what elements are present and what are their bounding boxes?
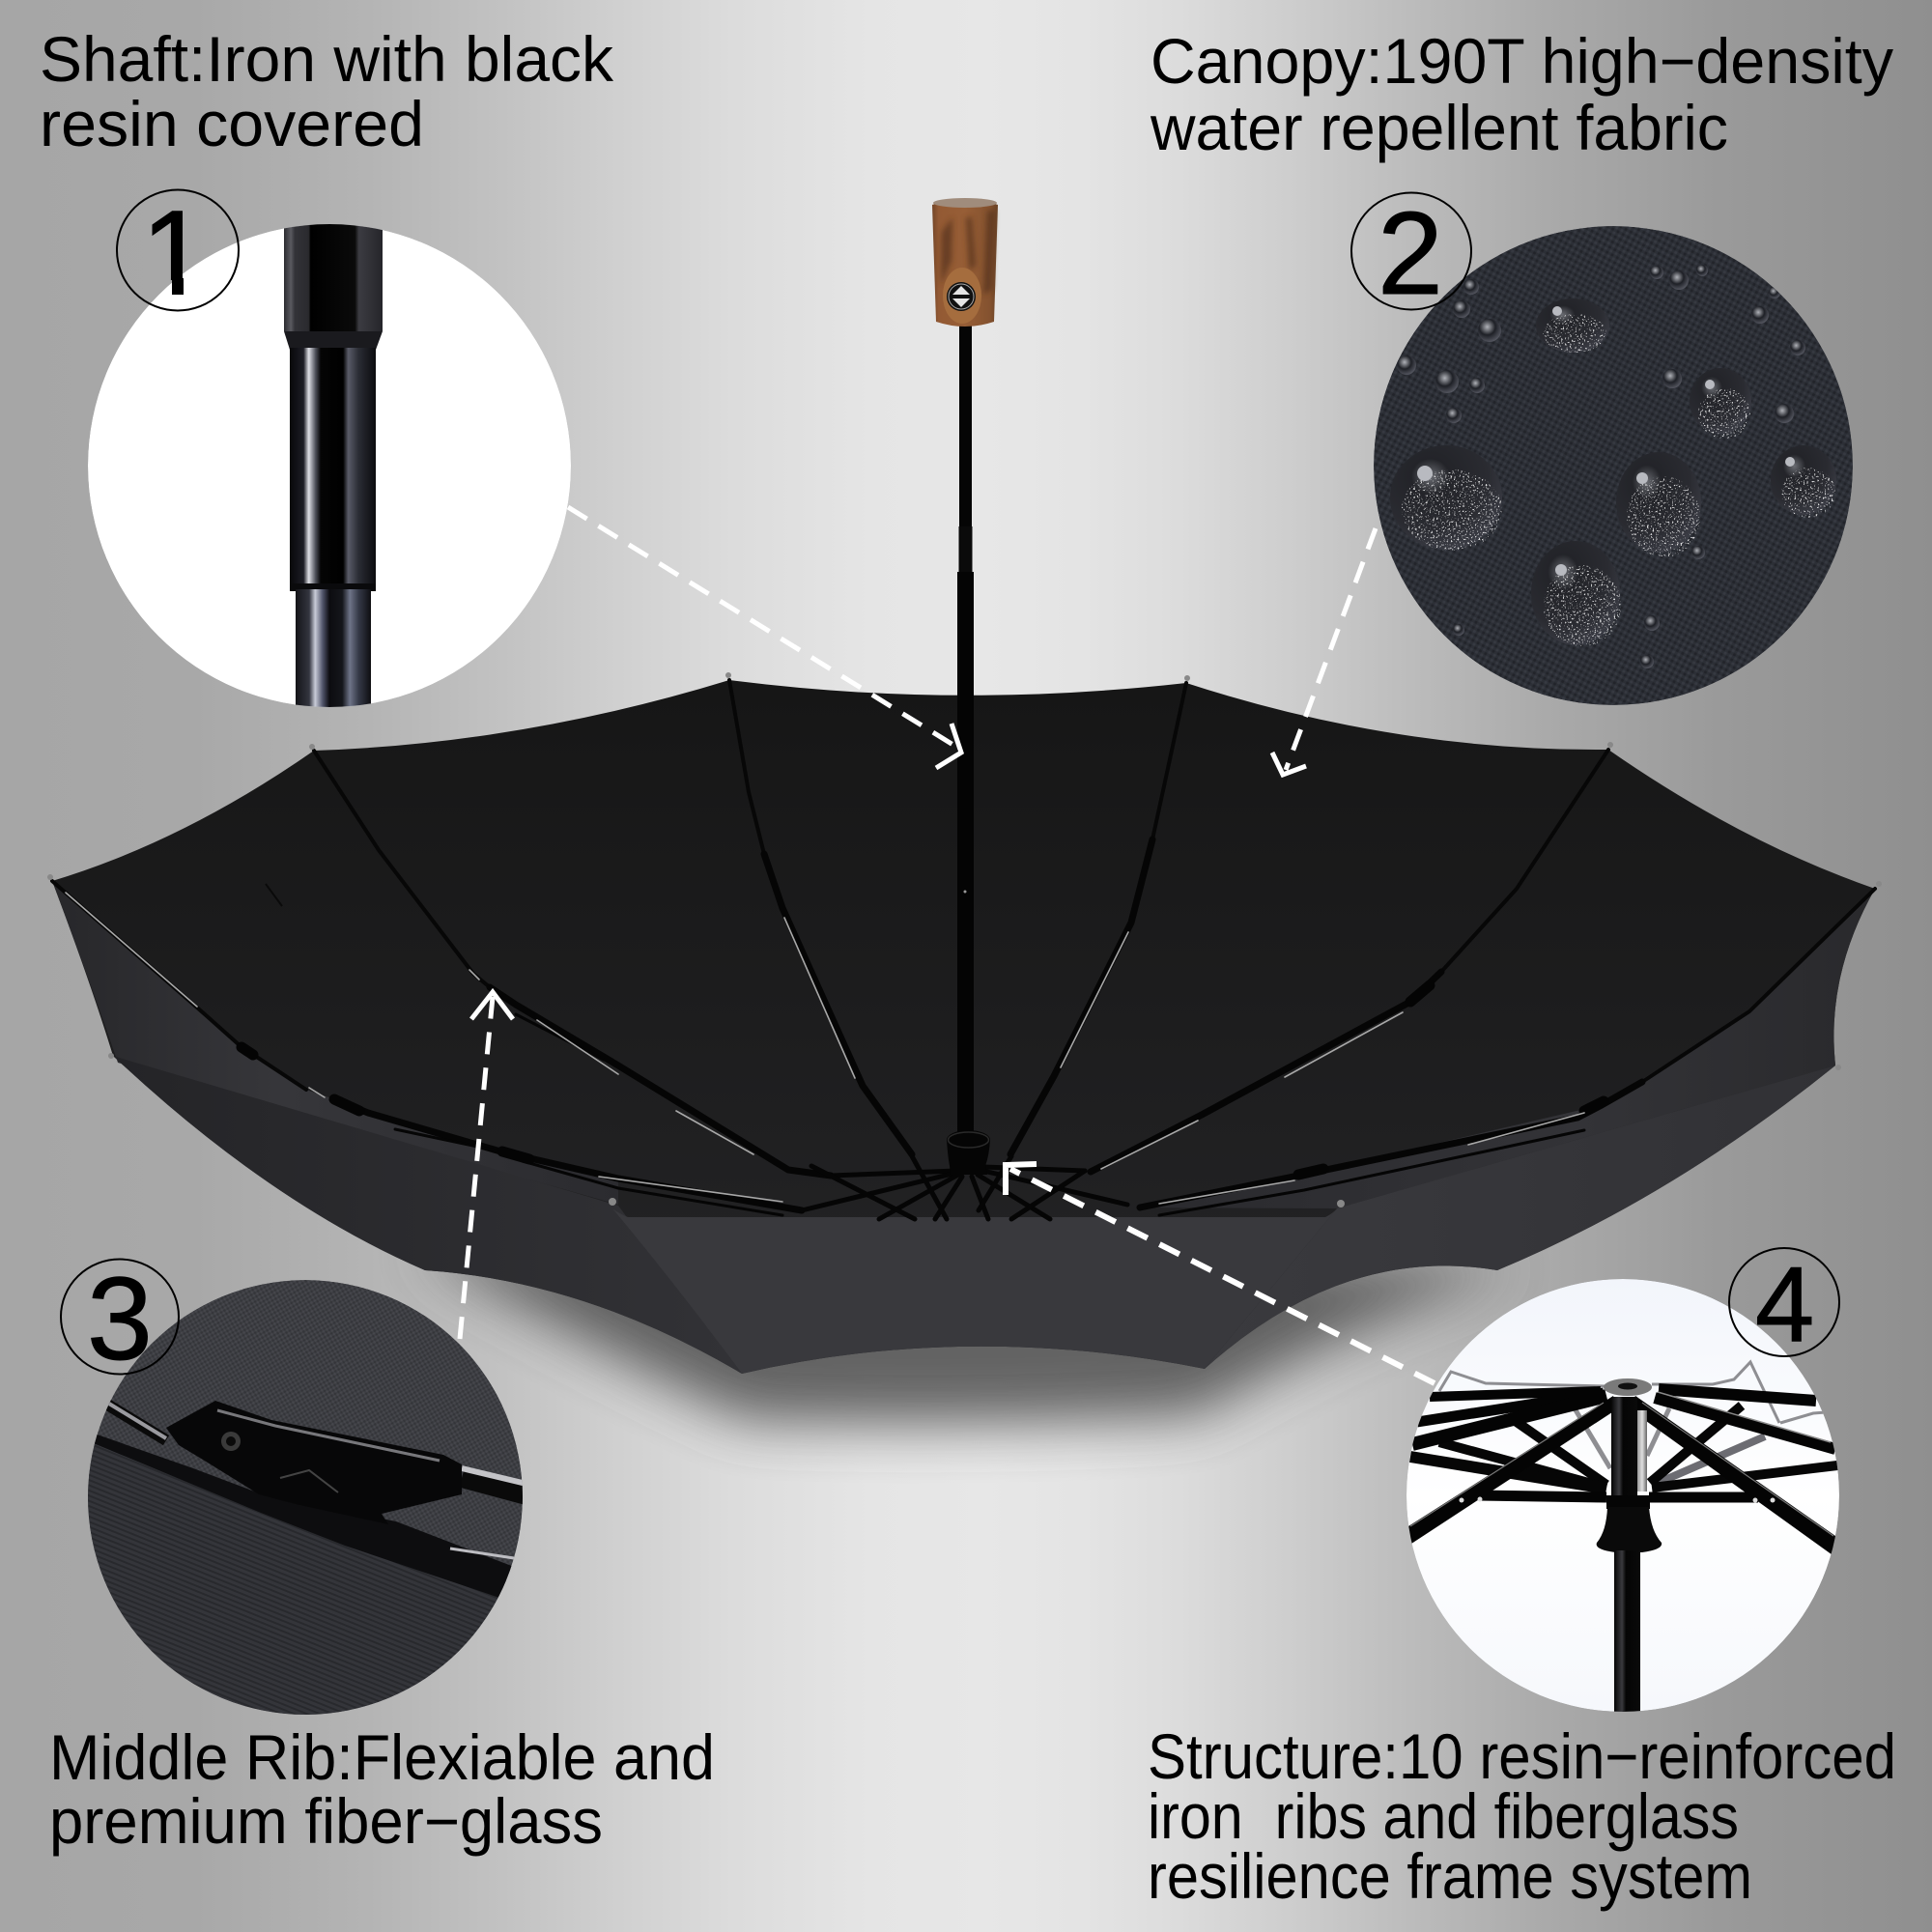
label: middle rib: Middle Rib:Flexiable and: [49, 1721, 715, 1793]
rivets: [1459, 1497, 1776, 1503]
handle button: [943, 268, 981, 324]
arrow 3: [460, 992, 513, 1339]
fabric below seam: [88, 1441, 506, 1715]
label: structure: iron ribs and fiberglass: [1148, 1780, 1739, 1852]
canopy underside: [52, 680, 1875, 1374]
canopy scratch: [266, 884, 282, 906]
arrow 4: [1006, 1164, 1435, 1383]
lower left panel: [113, 1056, 742, 1374]
shaft: [947, 325, 990, 1175]
detail circle 1: shaft: [88, 220, 571, 709]
label: shaft: [40, 23, 614, 159]
detail circle 4: frame structure: [1406, 1279, 1839, 1715]
label: canopy: [1150, 25, 1893, 163]
arrow 2: [1272, 528, 1376, 775]
number badge 3: [61, 1253, 179, 1384]
wood grain: [941, 211, 995, 295]
label: structure: resilience frame system: [1148, 1840, 1752, 1912]
number badge 1: 1: [141, 186, 209, 321]
pole: [1614, 1550, 1640, 1715]
umbrella: [47, 672, 1882, 1374]
fold shadow: [89, 1432, 522, 1599]
lower ring: [1606, 1495, 1650, 1509]
number badge 4: 4: [1755, 1245, 1814, 1364]
rib joints: [242, 985, 1604, 1175]
wooden handle: [932, 198, 998, 327]
label: canopy: Canopy:190T high−density: [1151, 25, 1893, 97]
top cap: [1604, 1378, 1652, 1396]
silver rib tips: [1439, 1362, 1826, 1485]
centre panel: [612, 1208, 1337, 1374]
lower right panel: [1205, 1065, 1835, 1369]
number badge 1: [117, 186, 239, 321]
main struts: [1412, 1389, 1835, 1497]
label: shaft: Shaft:Iron with black: [40, 23, 614, 95]
flared collar: [1597, 1507, 1662, 1552]
thin struts: [1410, 1406, 1837, 1489]
detail circle 3: middle rib joint: [88, 1280, 523, 1715]
label: shaft: resin covered: [40, 88, 424, 159]
left side panel: [52, 881, 618, 1205]
arrow 1: [568, 507, 961, 768]
label: canopy: water repellent fabric: [1150, 92, 1728, 163]
droplets: [1390, 265, 1836, 668]
centre column: [1611, 1397, 1637, 1499]
number badge 2: 2: [1378, 187, 1443, 319]
hub collar: [947, 1130, 990, 1175]
number badge 4: [1729, 1245, 1839, 1364]
rib tips: [47, 672, 1882, 1208]
rib rods: [104, 1403, 166, 1440]
ribs: [52, 680, 1875, 1215]
label: middle rib: [49, 1721, 715, 1857]
right side panel: [1140, 889, 1875, 1208]
hub struts: [802, 1154, 1127, 1219]
number badge 3: 3: [87, 1253, 153, 1384]
number badge 2: [1351, 187, 1471, 319]
detail circle 2: water droplets on fabric: [1374, 226, 1853, 705]
label: middle rib: premium fiber−glass: [49, 1785, 603, 1857]
label: structure: [1148, 1720, 1896, 1912]
umbrella shadow: [415, 1246, 1517, 1424]
hinge: [166, 1401, 462, 1524]
